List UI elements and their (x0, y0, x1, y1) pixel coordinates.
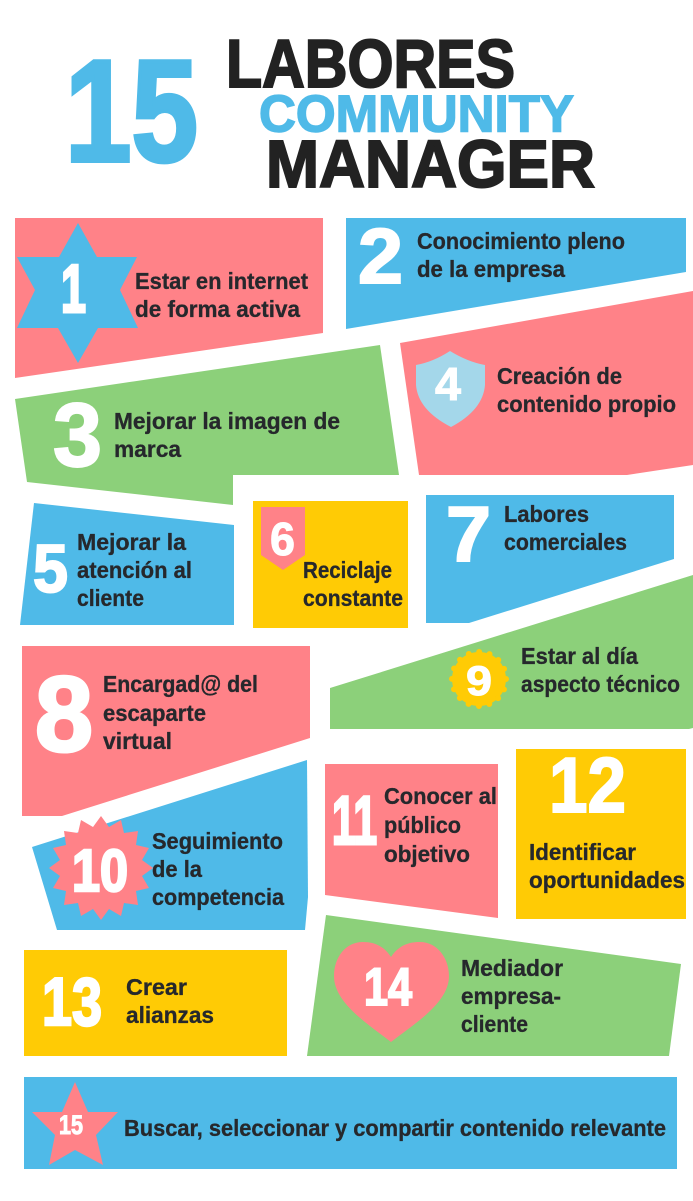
panel: 11 Conocer al público objetivo: objetivo (384, 841, 470, 867)
panel: 8 Encargad@ del escaparte virtual: Encargad@ del (103, 671, 258, 697)
icon: scalloped badge (452, 652, 506, 706)
icon: heart: 14 (364, 958, 412, 1017)
panel: 11 Conocer al público objetivo (325, 764, 498, 918)
panel: 5 Mejorar la atención al cliente: Mejorar la (77, 529, 186, 555)
panel: 5 Mejorar la atención al cliente: cliente (77, 585, 144, 611)
panel: 8 Encargad@ del escaparte virtual: virtual (103, 728, 172, 754)
panel: 15 Buscar, seleccionar y compartir contenido relevante: Buscar, seleccionar y compartir contenido relevante (124, 1115, 666, 1141)
title: LABORES (226, 26, 515, 102)
panel: 3 Mejorar la imagen de marca: Mejorar la imagen de (114, 408, 340, 434)
panel: 9 Estar al día aspecto técnico (330, 575, 693, 729)
panel: 2 Conocimiento pleno (346, 212, 686, 329)
panel: 7 Labores comerciales: Labores (504, 501, 589, 527)
title: MANAGER (266, 127, 595, 202)
panel: 13 Crear alianzas: alianzas (126, 1002, 214, 1028)
icon: scalloped badge: 9 (466, 657, 492, 704)
panel: 14 Mediador empresa-cliente (307, 915, 681, 1056)
panel: 1 Estar en internet: de forma activa (135, 296, 300, 322)
panel: 2 Conocimiento pleno: Conocimiento pleno (417, 228, 625, 254)
panel: 5 Mejorar la atención al cliente (20, 503, 234, 625)
panel: 2 Conocimiento pleno: 2 (358, 212, 403, 300)
icon: six-point star: 1 (61, 251, 86, 327)
icon: five-point star (32, 1082, 118, 1165)
icon: five-point star: 15 (59, 1110, 83, 1140)
icon: ribbon (261, 507, 305, 570)
panel: 5 Mejorar la atención al cliente: 5 (33, 531, 68, 607)
panel: 2 Conocimiento pleno: de la empresa (417, 256, 565, 282)
panel: 7 Labores comerciales: 7 (446, 490, 491, 578)
panel: 9 Estar al día aspecto técnico: Estar al día (521, 643, 638, 669)
panel: 6 Reciclaje constante (253, 501, 408, 628)
panel: 5 Mejorar la atención al cliente: atención al (77, 557, 192, 583)
panel: 8 Encargad@ del escaparte virtual: 8 (35, 654, 93, 774)
icon: shield: 4 (435, 358, 461, 410)
panel: 4 Creación de contenido propio (400, 291, 693, 475)
panel: 13 Crear alianzas (24, 950, 287, 1056)
icon: starburst (49, 816, 153, 920)
panel: 14 Mediador empresa-cliente: Mediador (461, 955, 563, 981)
panel: 7 Labores comerciales: comerciales (504, 529, 627, 555)
panel: 4 Creación de contenido propio: Creación de (497, 363, 622, 389)
panel: 11 Conocer al público objetivo: Conocer al (384, 783, 497, 809)
panel: 6 Reciclaje constante: Reciclaje (303, 557, 392, 583)
icon: heart (334, 942, 449, 1042)
panel: 3 Mejorar la imagen de marca: 3 (53, 386, 102, 486)
panel: 13 Crear alianzas: Crear (126, 974, 187, 1000)
panel: 1 Estar en internet (15, 218, 323, 378)
title (65, 26, 595, 202)
panel: 10 Seguimiento de la competencia: Seguimiento (152, 828, 283, 854)
panel: 4 Creación de contenido propio: contenido propio (497, 391, 676, 417)
panel: 10 Seguimiento de la competencia: de la (152, 856, 202, 882)
panel: 1 Estar en internet: Estar en internet (135, 268, 308, 294)
panel: 6 Reciclaje constante: constante (303, 585, 403, 611)
panel: 3 Mejorar la imagen de marca: marca (114, 436, 181, 462)
title: COMMUNITY (259, 86, 574, 144)
panel: 9 Estar al día aspecto técnico: aspecto técnico (521, 671, 680, 697)
panel: 14 Mediador empresa-cliente: cliente (461, 1011, 528, 1037)
panel: 12 Identificar oportunidades: Identificar (529, 839, 636, 865)
panel: 13 Crear alianzas: 13 (42, 964, 102, 1040)
panel: 12 Identificar oportunidades: 12 (549, 741, 626, 829)
panel: 10 Seguimiento de la competencia: competencia (152, 884, 284, 910)
panel: 15 Buscar, seleccionar y compartir contenido relevante (24, 1077, 677, 1169)
panel: 12 Identificar oportunidades: oportunidades (529, 867, 685, 893)
panel: 11 Conocer al público objetivo: 11 (332, 782, 377, 859)
icon: shield (416, 351, 485, 427)
panel: 10 Seguimiento de la competencia (32, 760, 308, 930)
panel: 8 Encargad@ del escaparte virtual: escaparte (103, 700, 206, 726)
panel: 3 Mejorar la imagen de marca (15, 345, 399, 505)
icon: ribbon: 6 (270, 513, 295, 565)
icon: starburst: 10 (72, 838, 128, 904)
icon: six-point star (17, 223, 138, 363)
panel: 7 Labores comerciales (426, 490, 674, 623)
panel: 12 Identificar oportunidades (516, 741, 686, 919)
panel: 11 Conocer al público objetivo: público (384, 812, 461, 838)
panel: 8 Encargad@ del escaparte virtual (22, 646, 310, 816)
panel: 14 Mediador empresa-cliente: empresa- (461, 983, 561, 1009)
title: 15 (65, 30, 198, 192)
